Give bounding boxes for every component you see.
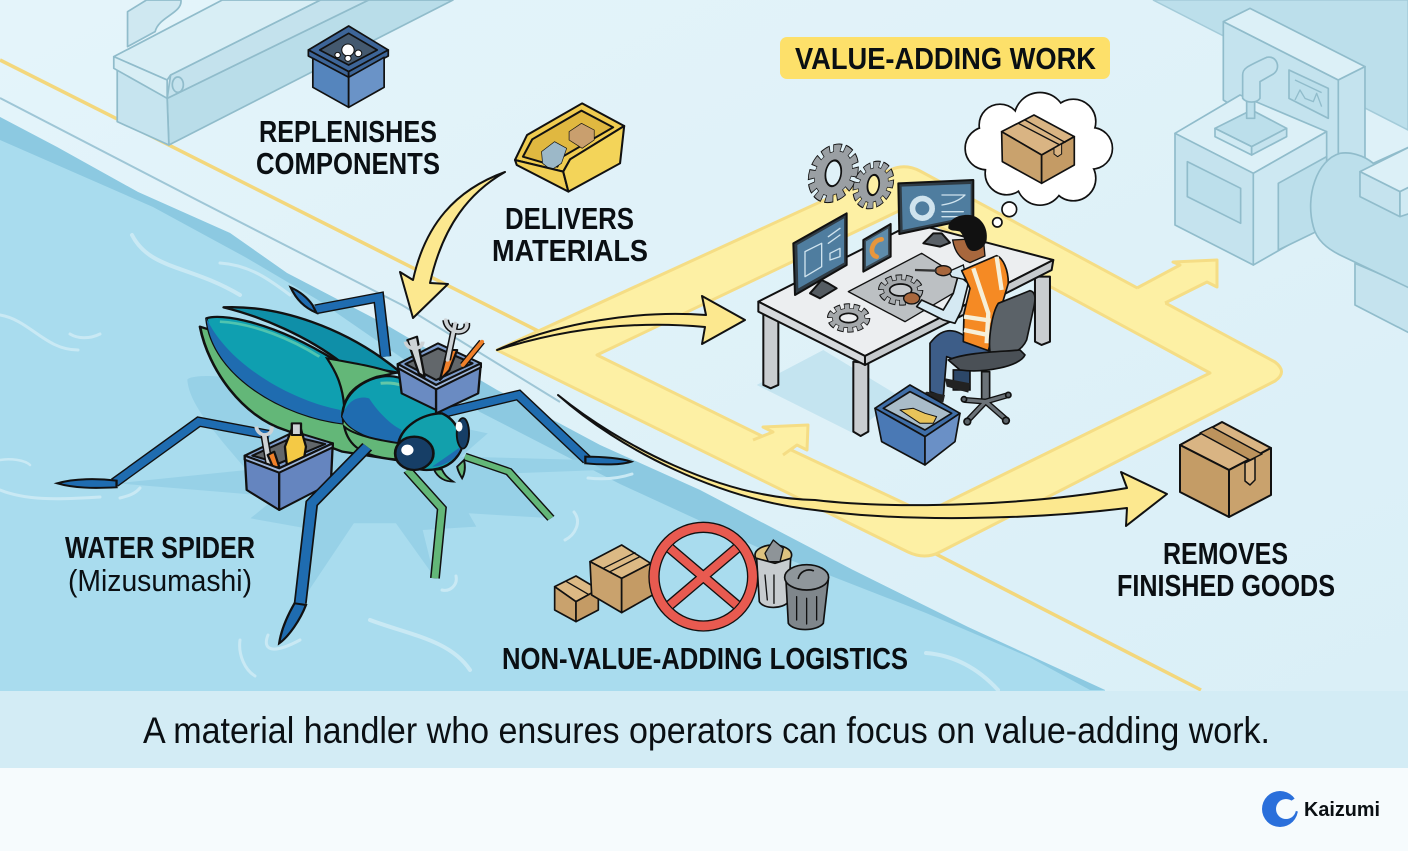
yellow floor line lower bbox=[930, 551, 1201, 690]
large box bbox=[590, 545, 653, 613]
thought cloud bbox=[966, 93, 1112, 227]
lower tool box bbox=[245, 423, 333, 510]
delivers label: DELIVERS bbox=[505, 201, 634, 236]
value-adding work arrow bbox=[497, 296, 745, 350]
floating gears bbox=[812, 144, 890, 209]
rear leg upper right bbox=[291, 287, 386, 357]
hands bbox=[904, 293, 920, 304]
icon: finished goods box bbox=[1180, 422, 1271, 517]
workstation bbox=[757, 93, 1112, 465]
water edge dark band bbox=[0, 117, 1105, 690]
removes label: FINISHED GOODS bbox=[1117, 568, 1335, 603]
desk bbox=[758, 223, 1053, 436]
small box bbox=[555, 576, 598, 622]
footer panel bbox=[0, 768, 1408, 851]
green legs bbox=[407, 457, 551, 578]
delivers label: MATERIALS bbox=[492, 233, 648, 268]
trousers bbox=[930, 331, 997, 397]
blue bin by desk bbox=[875, 385, 960, 465]
replenishes label: COMPONENTS bbox=[256, 146, 440, 181]
neck and face bbox=[953, 238, 985, 263]
water spider insect bbox=[57, 287, 631, 643]
green wing patch bbox=[327, 358, 394, 407]
Kaizumi logo: Kaizumi bbox=[1304, 799, 1380, 821]
box in cloud bbox=[1002, 115, 1074, 183]
non-value label: NON-VALUE-ADDING LOGISTICS bbox=[502, 641, 908, 676]
conveyor machine top left bbox=[114, 0, 453, 145]
green wing underside bbox=[200, 327, 400, 460]
hair bbox=[948, 215, 987, 251]
caption band bbox=[0, 691, 1408, 768]
Kaizumi logo bbox=[1262, 791, 1380, 827]
value-adding work pill: VALUE-ADDING WORK bbox=[795, 41, 1097, 76]
desk floor shadow bbox=[757, 350, 900, 433]
upper right back wall bbox=[1153, 0, 1408, 130]
water spider label: WATER SPIDER bbox=[65, 530, 255, 565]
belly bbox=[344, 427, 400, 459]
yellow value stream loop bbox=[497, 167, 1282, 556]
mandibles bbox=[434, 460, 465, 482]
safety vest bbox=[962, 256, 1008, 351]
chair bbox=[948, 291, 1035, 425]
factory machine right bbox=[1175, 8, 1408, 333]
mat with gear bbox=[848, 253, 970, 322]
replenishes label: REPLENISHES bbox=[259, 114, 437, 149]
tablet bbox=[863, 224, 891, 272]
worker bbox=[904, 215, 1035, 425]
finished goods arrow bbox=[558, 395, 1167, 526]
delivers materials arrow bbox=[400, 172, 505, 318]
shadow under bug bbox=[117, 376, 603, 603]
back monitor bbox=[898, 180, 973, 247]
replenishes label bbox=[256, 114, 440, 181]
desk gear bbox=[831, 307, 867, 329]
gray curb line bbox=[0, 98, 560, 402]
thorax bbox=[342, 376, 440, 443]
water bbox=[0, 117, 1105, 700]
yellow floor line upper bbox=[0, 60, 560, 342]
right exit arrow bbox=[1135, 260, 1217, 320]
back wing bbox=[224, 307, 402, 373]
upper tool box bbox=[398, 320, 482, 413]
icon: blue component bin bbox=[308, 26, 388, 107]
caption band: A material handler who ensures operators can focus on value-adding work. bbox=[143, 710, 1270, 751]
prohibition sign bbox=[654, 527, 753, 626]
left monitor bbox=[793, 213, 847, 298]
water spider label: (Mizusumashi) bbox=[68, 563, 252, 598]
shirt arm bbox=[917, 275, 968, 323]
removes label bbox=[1117, 536, 1335, 603]
icon: yellow parts bin bbox=[515, 103, 624, 192]
front wing bbox=[206, 317, 345, 423]
right front leg bbox=[442, 395, 631, 464]
water ripples bbox=[0, 235, 998, 690]
water spider label bbox=[65, 530, 255, 598]
trash cans bbox=[755, 540, 829, 630]
non-value logistics icons bbox=[555, 527, 829, 630]
eyes bbox=[395, 437, 433, 470]
delivers label bbox=[492, 201, 648, 268]
head bbox=[398, 413, 461, 470]
front center leg bbox=[279, 447, 367, 643]
desk branch arrow bbox=[753, 425, 808, 470]
left rear leg bbox=[57, 422, 270, 488]
removes label: REMOVES bbox=[1163, 536, 1288, 571]
